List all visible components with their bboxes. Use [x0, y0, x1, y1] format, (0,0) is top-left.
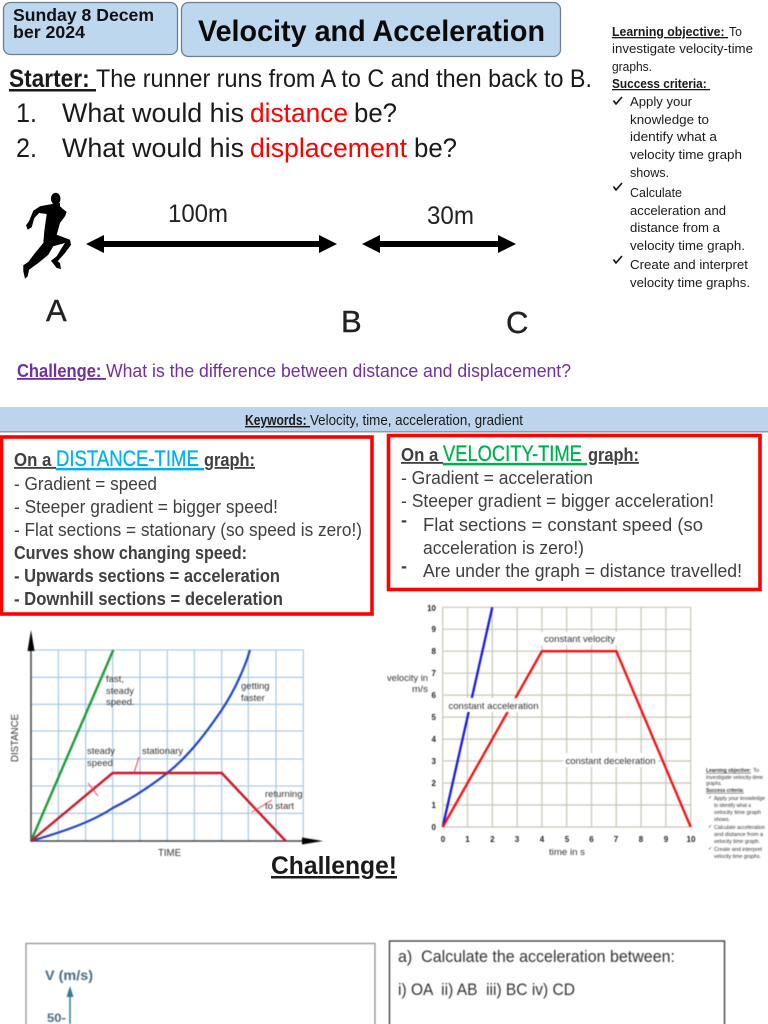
criterion 1: Apply your — [630, 94, 693, 109]
axis label: velocity: m/s — [412, 684, 428, 695]
y-axis numbers: 6 — [432, 691, 437, 700]
panel: distance-time notes: - Upwards sections = acceleration — [14, 566, 280, 586]
criterion 1: shows. — [630, 165, 669, 180]
learning objectives panel: Learning objective: — [612, 24, 728, 39]
panel: distance-time notes — [2, 437, 372, 614]
label: getting faster — [241, 681, 270, 704]
panel: velocity-time notes: Are under the graph = distance travelled! — [423, 561, 742, 581]
criterion 3: Create and interpret — [630, 257, 748, 272]
criterion 1: knowledge to — [630, 112, 709, 127]
small repeated objectives — [706, 768, 765, 860]
panel: velocity-time notes: acceleration is zero!) — [423, 538, 584, 558]
small repeated objectives: Calculate acceleration — [714, 825, 765, 831]
criterion 1 — [614, 94, 742, 180]
label: steady speed: speed — [87, 758, 113, 769]
label: constant deceleration: constant deceleration — [566, 756, 656, 767]
starter heading: The runner runs from A to C and then back to B. — [96, 65, 592, 93]
label: returning to start: returning — [265, 789, 302, 800]
panel: velocity-time notes: - Steeper gradient = bigger acceleration! — [401, 491, 714, 511]
panel: distance-time notes: - Steeper gradient = bigger speed! — [14, 497, 278, 517]
small repeated objectives: ✓ — [708, 795, 712, 801]
panel: velocity-time notes: - — [401, 556, 407, 576]
y-axis numbers: 0 — [432, 823, 437, 832]
x-axis numbers — [441, 835, 696, 844]
axis label: velocity: velocity in — [387, 673, 428, 684]
y-axis numbers: 4 — [432, 735, 437, 744]
question 1: What would his — [62, 98, 244, 128]
label: 30m: 30m — [427, 202, 474, 230]
label: 100m: 100m — [168, 200, 228, 228]
small repeated objectives: and distance from a — [714, 832, 763, 838]
question 1: be? — [354, 98, 397, 128]
learning objectives panel: investigate velocity-time — [612, 41, 753, 56]
y-axis numbers: 10 — [427, 604, 437, 613]
panel: distance-time notes: - Flat sections = stationary (so speed is zero!) — [14, 520, 362, 540]
keywords band: Velocity, time, acceleration, gradient — [310, 413, 523, 429]
criterion 2: acceleration and — [630, 203, 726, 218]
label: A: A — [46, 293, 67, 328]
y-axis numbers: 7 — [432, 669, 437, 678]
axis label: distance: DISTANCE — [10, 714, 21, 762]
x-axis numbers: 9 — [664, 835, 669, 844]
x-axis numbers: 0 — [441, 835, 446, 844]
label: fast steady speed: fast, — [106, 674, 124, 685]
y-axis numbers: 5 — [432, 713, 437, 722]
panel: distance-time notes: - Downhill sections = deceleration — [14, 589, 283, 609]
panel heading: graph: — [204, 450, 255, 470]
small repeated objectives: to identify what a — [714, 803, 751, 809]
x-axis numbers: 6 — [589, 835, 594, 844]
keywords band — [0, 407, 768, 432]
chart: distance-time graph — [10, 630, 323, 859]
x-axis numbers: 5 — [565, 835, 570, 844]
small repeated objectives: graphs. — [706, 781, 722, 787]
y-axis numbers — [427, 604, 437, 832]
curve: getting faster — [31, 650, 250, 841]
line: red trapezium velocity — [443, 651, 691, 827]
starter heading: Starter: — [9, 65, 96, 93]
small repeated objectives: ✓ — [708, 846, 712, 852]
question 2 — [16, 133, 457, 163]
question 2: be? — [414, 133, 457, 163]
question 1: distance — [250, 98, 348, 128]
small repeated objectives: Success criteria: — [706, 788, 744, 794]
y-axis numbers: 8 — [432, 647, 437, 656]
panel heading: On a — [14, 450, 56, 470]
label: steady speed — [87, 746, 115, 769]
keywords band: Keywords: — [245, 413, 310, 429]
label: fast steady speed: speed. — [106, 697, 135, 708]
icon: y axis arrow — [69, 990, 71, 1024]
criterion 2: distance from a — [630, 220, 721, 235]
axis label: V (m/s): V (m/s) — [45, 967, 93, 983]
question 1: 1. — [16, 98, 37, 128]
small repeated objectives: Create and interpret — [714, 847, 763, 853]
challenge question: Challenge: — [17, 361, 106, 381]
panel: velocity-time notes: Flat sections = constant speed (so — [423, 515, 703, 535]
panel: challenge questions — [390, 941, 724, 1024]
icon: running man — [23, 193, 71, 279]
small repeated objectives: investigate velocity-time — [706, 775, 763, 781]
criterion 2 — [614, 183, 745, 253]
axis label: velocity — [387, 673, 428, 695]
panel heading: VELOCITY-TIME — [443, 441, 587, 466]
panel: distance-time notes: Curves show changing speed: — [14, 543, 247, 563]
label: returning to start: to start — [265, 801, 294, 812]
small repeated objectives: Learning objective: — [706, 768, 751, 774]
small repeated objectives: velocity time graph. — [714, 839, 760, 845]
criterion 1: identify what a — [630, 129, 718, 144]
x-axis numbers: 1 — [465, 835, 470, 844]
panel: challenge questions: a) Calculate the acceleration between: — [398, 947, 675, 966]
panel: challenge questions: i) OA ii) AB iii) BC iv) CD — [398, 980, 575, 999]
title box: Velocity and Acceleration — [198, 15, 545, 48]
title box — [182, 2, 560, 56]
criterion 3 — [614, 256, 750, 290]
runner diagram — [23, 193, 528, 340]
panel heading: DISTANCE-TIME — [56, 446, 204, 471]
axis label: time: time in s — [549, 847, 585, 858]
x-axis numbers: 7 — [614, 835, 619, 844]
panel heading: On a — [401, 445, 443, 465]
line: blue steep velocity — [443, 607, 492, 827]
x-axis numbers: 2 — [490, 835, 495, 844]
learning objectives panel: graphs. — [612, 59, 652, 74]
criterion 2: Calculate — [630, 185, 682, 200]
criterion 3: velocity time graphs. — [630, 275, 750, 290]
criterion 1: velocity time graph — [630, 147, 742, 162]
panel: velocity-time notes: - — [401, 510, 407, 530]
question 2: What would his — [62, 133, 244, 163]
line: steady speed, stationary, returning — [31, 773, 286, 841]
learning objectives panel: To — [729, 24, 742, 39]
label: steady speed: steady — [87, 746, 115, 757]
small repeated objectives: shows. — [714, 817, 730, 823]
x-axis numbers: 3 — [515, 835, 520, 844]
challenge heading: Challenge! — [271, 852, 397, 880]
panel: velocity-time notes — [388, 436, 760, 590]
arrow: A to B, 100m — [86, 235, 337, 253]
date box — [4, 2, 178, 54]
small repeated objectives: Apply your knowledge — [714, 796, 765, 802]
x-axis numbers: 8 — [639, 835, 644, 844]
question 2: 2. — [16, 133, 37, 163]
y-axis numbers: 3 — [432, 757, 437, 766]
challenge question: What is the difference between distance and displacement? — [106, 361, 571, 381]
label: constant velocity: constant velocity — [544, 634, 615, 645]
label: B: B — [341, 304, 362, 339]
arrow: B to C, 30m — [362, 235, 516, 253]
axis label: time: TIME — [158, 848, 181, 859]
small repeated objectives: velocity time graph — [714, 810, 761, 816]
panel: distance-time notes: - Gradient = speed — [14, 474, 157, 494]
criterion 2: velocity time graph. — [630, 238, 745, 253]
question 1 — [16, 98, 397, 128]
label: fast steady speed: steady — [106, 686, 134, 697]
date box: Sunday 8 Decem — [13, 5, 154, 25]
line: fast steady speed — [31, 650, 113, 841]
small repeated objectives: ✓ — [708, 824, 712, 830]
label: getting faster: faster — [241, 693, 265, 704]
panel: challenge velocity graph — [26, 944, 375, 1024]
learning objectives panel: Success criteria: — [612, 76, 710, 91]
axes — [28, 630, 323, 844]
label: stationary: stationary — [142, 746, 183, 757]
small repeated objectives: To — [753, 768, 759, 774]
learning objectives panel — [612, 24, 753, 290]
leader lines — [88, 757, 272, 812]
chart: velocity-time graph — [387, 604, 696, 858]
x-axis numbers: 4 — [540, 835, 545, 844]
y-axis numbers: 1 — [432, 801, 437, 810]
label: getting faster: getting — [241, 681, 270, 692]
y-axis numbers: 9 — [432, 625, 437, 634]
label: constant acceleration: constant acceleration — [448, 701, 538, 712]
small repeated objectives: velocity time graphs. — [714, 854, 761, 860]
panel: velocity-time notes: - Gradient = acceleration — [401, 468, 593, 488]
date box: ber 2024 — [13, 22, 85, 42]
label: returning to start — [265, 789, 302, 812]
x-axis numbers: 10 — [687, 835, 696, 844]
panel heading: graph: — [588, 445, 639, 465]
label: fast steady speed — [106, 674, 135, 708]
question 2: displacement — [250, 133, 407, 163]
y-axis numbers: 2 — [432, 779, 437, 788]
label: C: C — [506, 305, 528, 340]
